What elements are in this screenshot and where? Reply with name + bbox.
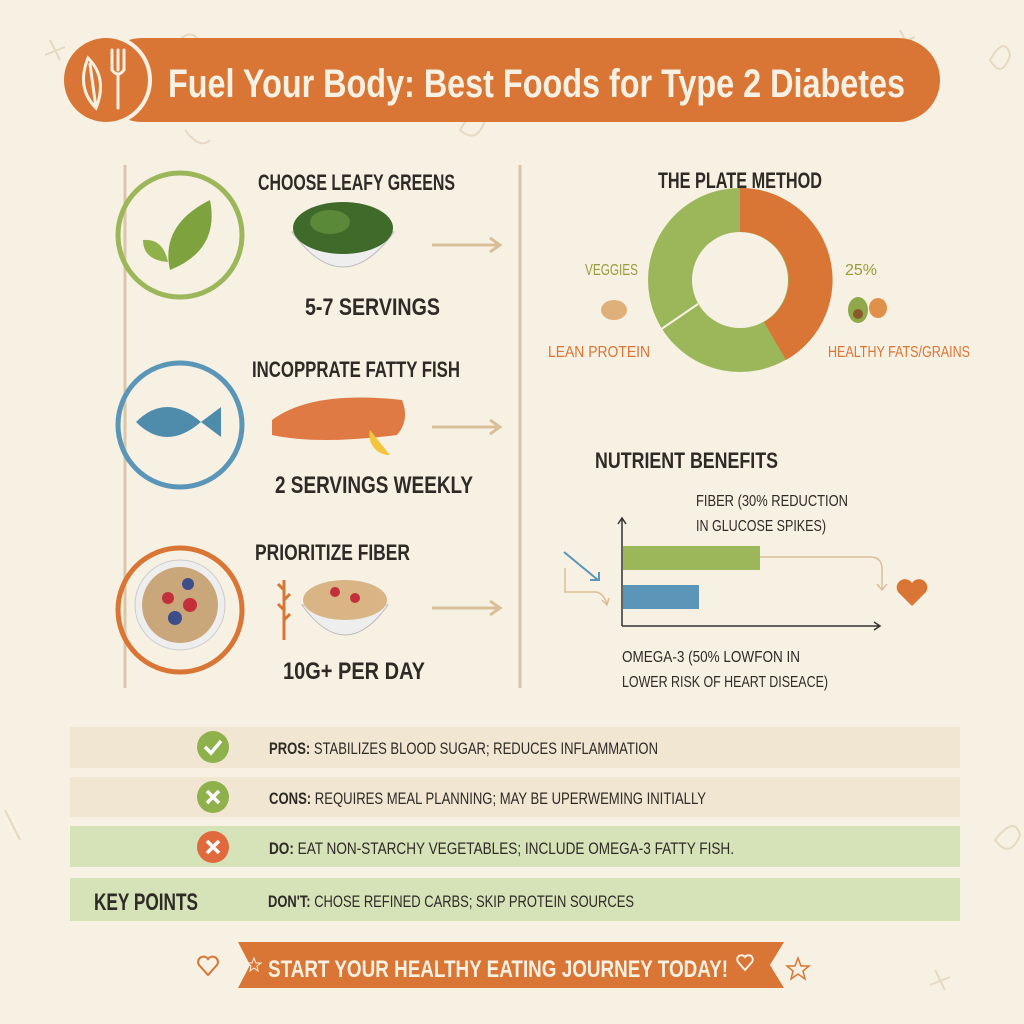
panel: nutrient benefits bar chart: NUTRIENT BENEFITS bbox=[595, 448, 778, 473]
panel: leafy greens: 5-7 SERVINGS bbox=[305, 294, 440, 321]
panel: fiber: PRIORITIZE FIBER bbox=[255, 540, 410, 565]
panel: nutrient benefits bar chart: OMEGA-3 (50% LOWFON IN bbox=[622, 649, 800, 666]
panel: leafy greens: CHOOSE LEAFY GREENS bbox=[258, 170, 455, 195]
panel: fatty fish bbox=[118, 357, 500, 499]
row: pros bbox=[70, 727, 960, 768]
title banner bbox=[62, 36, 940, 124]
row: cons: CONS: REQUIRES MEAL PLANNING; MAY BE UPERWEMING INITIALLY bbox=[269, 789, 706, 808]
panel: plate method: VEGGIES bbox=[585, 262, 638, 279]
panel: leafy greens bbox=[118, 170, 500, 321]
panel: nutrient benefits bar chart: LOWER RISK OF HEART DISEACE) bbox=[622, 674, 828, 691]
panel: fiber: 10G+ PER DAY bbox=[283, 658, 425, 685]
row: pros: PROS: STABILIZES BLOOD SUGAR; REDUCES INFLAMMATION bbox=[269, 739, 658, 758]
panel: plate method: 25% bbox=[845, 262, 877, 279]
row: cons bbox=[70, 777, 960, 817]
panel: nutrient benefits bar chart: FIBER (30% REDUCTION bbox=[696, 493, 848, 510]
panel: plate method bbox=[548, 168, 970, 372]
panel: plate method: HEALTHY FATS/GRAINS bbox=[828, 344, 970, 361]
row: do: DO: EAT NON-STARCHY VEGETABLES; INCLUDE OMEGA-3 FATTY FISH. bbox=[269, 839, 734, 858]
row: do bbox=[70, 826, 960, 867]
call to action banner: START YOUR HEALTHY EATING JOURNEY TODAY! bbox=[268, 956, 728, 983]
panel: plate method: LEAN PROTEIN bbox=[548, 344, 650, 361]
row: key points / don't bbox=[70, 878, 960, 921]
row: key points / don't: DON'T: CHOSE REFINED CARBS; SKIP PROTEIN SOURCES bbox=[268, 892, 634, 911]
icon: fork and leaf bbox=[84, 50, 124, 108]
panel: plate method: THE PLATE METHOD bbox=[658, 168, 822, 193]
row: key points / don't: KEY POINTS bbox=[94, 889, 198, 916]
call to action banner bbox=[198, 942, 809, 988]
panel: fatty fish: 2 SERVINGS WEEKLY bbox=[275, 472, 473, 499]
donut chart bbox=[648, 188, 833, 372]
panel: fatty fish: INCOPPRATE FATTY FISH bbox=[252, 357, 460, 382]
panel: nutrient benefits bar chart bbox=[564, 448, 927, 691]
panel: nutrient benefits bar chart: IN GLUCOSE SPIKES) bbox=[696, 518, 826, 535]
panel: fiber bbox=[118, 540, 500, 685]
